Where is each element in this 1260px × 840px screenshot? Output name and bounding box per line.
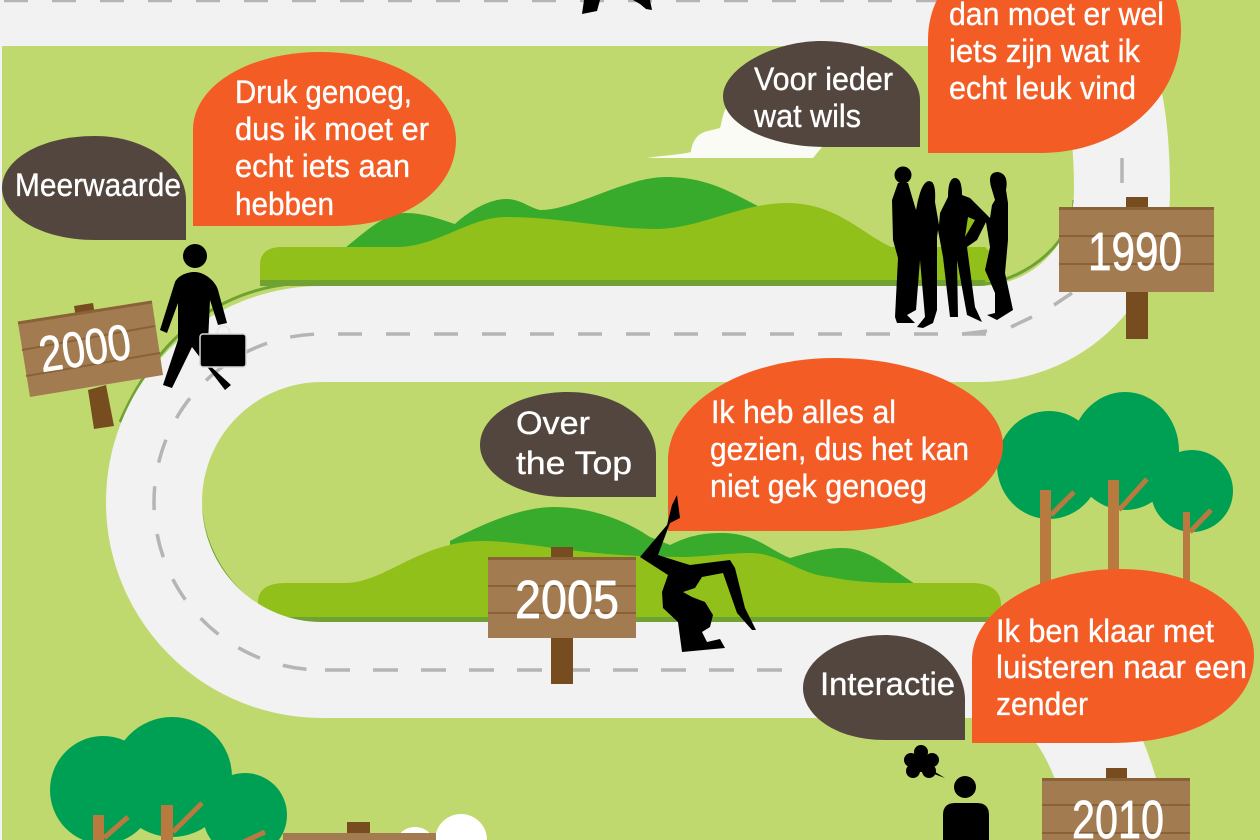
bubble: Meerwaarde: Meerwaarde	[15, 167, 181, 203]
bubble: Ik heb alles al: Ik heb alles al	[711, 394, 896, 430]
bubble: Druk genoeg	[193, 52, 456, 226]
bubble: Druk genoeg: dus ik moet er	[235, 111, 429, 147]
sign: 1990: 1990	[1088, 222, 1182, 282]
bubble: Over the Top: Over	[516, 405, 590, 441]
bubble: Voor ieder wat wils	[723, 41, 920, 147]
bubble: Meerwaarde	[2, 136, 186, 240]
cloud: bottom	[398, 814, 487, 840]
road edge shading	[120, 200, 1074, 622]
trees: right	[997, 392, 1233, 600]
bubble: Druk genoeg: Druk genoeg,	[235, 74, 412, 110]
bubble: Ik heb alles al: gezien, dus het kan	[710, 431, 969, 467]
sign: 2000: 2000	[35, 314, 135, 383]
bubble: Voor ieder wat wils: wat wils	[753, 98, 861, 134]
bubble: Over the Top: the Top	[516, 445, 632, 481]
bubble: Ik heb alles al	[668, 358, 1003, 531]
bubble: Ik heb alles al: niet gek genoeg	[710, 468, 927, 504]
bubble: Over the Top	[480, 392, 656, 497]
bubble: Interactie	[803, 635, 965, 740]
bubble: Interactie: Interactie	[820, 666, 955, 702]
sign: bottom left	[283, 822, 436, 840]
silhouette: group of four people	[892, 166, 1013, 328]
bubble: top right orange	[928, 0, 1181, 153]
bubble: top right orange: echt leuk vind	[949, 70, 1136, 106]
bubble: Ik ben klaar met: zender	[996, 686, 1088, 722]
sign: 2010	[1042, 768, 1190, 840]
trees: left	[50, 717, 287, 840]
bubble: Ik ben klaar met: Ik ben klaar met	[996, 613, 1214, 649]
hills: upper band	[260, 177, 1006, 284]
cloud: upper	[647, 108, 850, 158]
silhouette: walker at the top	[582, 0, 652, 14]
silhouette: thinking person with thought cloud	[904, 745, 989, 840]
road centre dashes	[4, 0, 1122, 670]
silhouette: businessman with briefcase	[160, 244, 246, 390]
bubble: top right orange: iets zijn wat ik	[949, 33, 1141, 69]
bubble: Druk genoeg: echt iets aan	[235, 148, 410, 184]
sign: 2000	[18, 302, 163, 429]
sign: 2005	[488, 547, 636, 684]
bubble: Druk genoeg: hebben	[235, 186, 334, 222]
bubble: Ik ben klaar met: luisteren naar een	[996, 649, 1247, 685]
bubble: Voor ieder wat wils: Voor ieder	[754, 61, 893, 97]
bubble: Ik ben klaar met	[972, 569, 1254, 743]
sign: 2005: 2005	[515, 570, 619, 630]
hills: lower band	[258, 507, 1001, 620]
silhouette: gymnast	[640, 495, 756, 652]
sign: 1990	[1059, 197, 1214, 339]
